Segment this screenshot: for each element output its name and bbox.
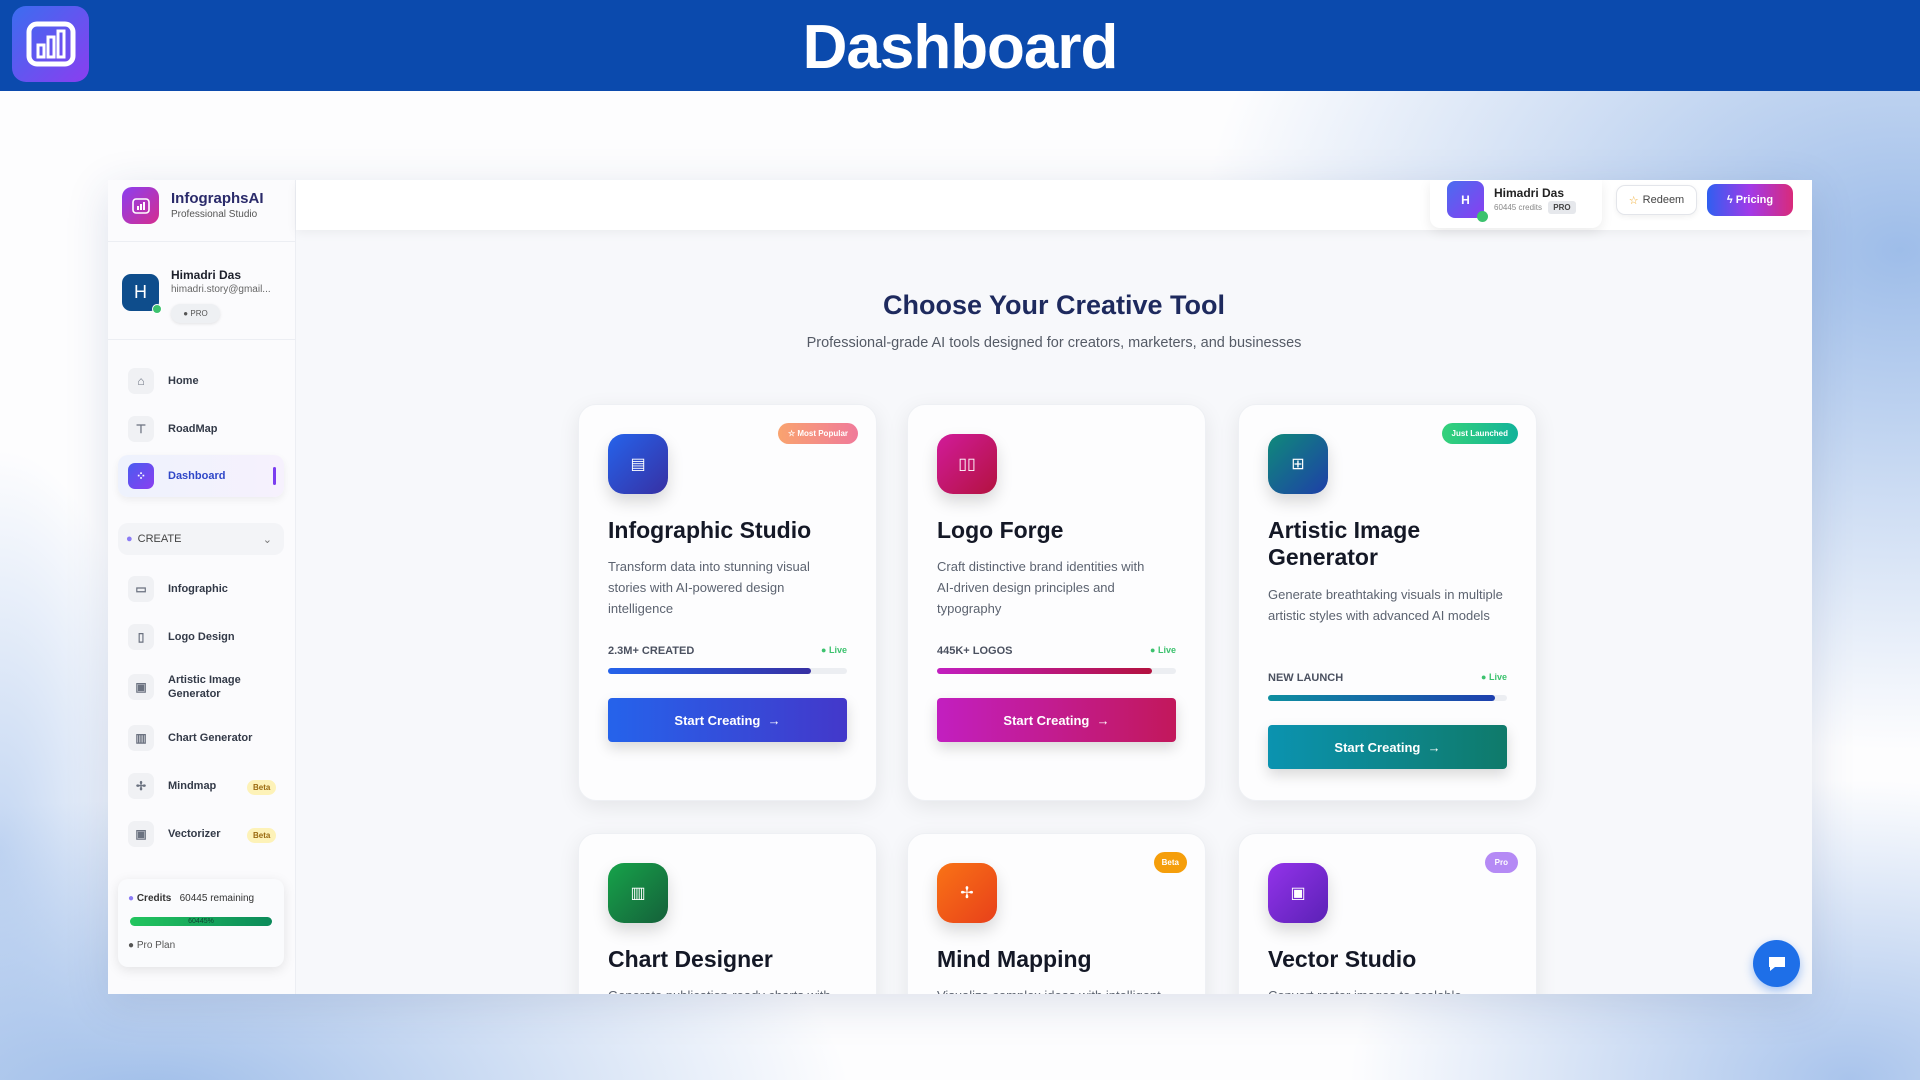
nav: Artistic Image Generator: Artistic Image (168, 674, 241, 686)
card: Artistic Image Generator: NEW LAUNCH (1268, 672, 1343, 684)
card: Artistic Image Generator: ⊞ (1291, 456, 1305, 473)
user profile: himadri.story@gmail... (171, 284, 271, 295)
credits box (118, 879, 284, 967)
card: Infographic Studio: ☆ Most Popular (788, 429, 848, 438)
redeem button: ☆ (1629, 194, 1639, 206)
nav: Infographic (128, 576, 228, 602)
nav: Artistic Image Generator (128, 674, 241, 700)
card: Vector Studio (1238, 833, 1537, 1053)
nav: Home (128, 368, 199, 394)
nav: Artistic Image Generator: ▣ (135, 680, 147, 694)
card: Artistic Image Generator: Artistic Image Generator (1268, 517, 1420, 570)
nav: Infographic: Infographic (168, 583, 228, 595)
section: CREATE (118, 523, 284, 555)
card: Infographic Studio: Infographic Studio (608, 517, 811, 543)
redeem button: Redeem (1643, 194, 1684, 206)
nav: Vectorizer (128, 821, 276, 847)
user chip: H (1461, 192, 1470, 206)
nav: Infographic: ▭ (135, 582, 147, 596)
pricing button (1707, 184, 1793, 216)
top bar (296, 180, 1812, 230)
nav: Artistic Image Generator: Generator (168, 688, 221, 700)
card: Vector Studio: Pro (1495, 858, 1508, 867)
credits box: ● Pro Plan (128, 940, 175, 951)
card: Infographic Studio: ● Live (821, 645, 847, 655)
user chip: 60445 credits PRO (1494, 203, 1571, 212)
card: Logo Forge (907, 404, 1206, 801)
pricing button: ϟ Pricing (1727, 194, 1773, 206)
nav: Mindmap: Mindmap (168, 780, 216, 792)
card: Infographic Studio: Start Creating → (674, 712, 781, 728)
card: Infographic Studio (578, 404, 877, 801)
user profile: ● PRO (183, 309, 208, 318)
heading: Choose Your Creative Tool (883, 290, 1225, 320)
icon: chat bubble (1753, 940, 1800, 987)
icon: sidebar logo (122, 187, 159, 224)
section: CREATE: ● (126, 533, 133, 545)
nav: RoadMap: RoadMap (168, 423, 218, 435)
card: Logo Forge: Craft distinctive brand identities with AI-driven design principles and typography (937, 559, 1144, 616)
nav: Mindmap (128, 773, 276, 799)
brand text: Professional Studio (171, 209, 257, 220)
user profile (108, 241, 296, 340)
user profile: Himadri Das (171, 268, 241, 282)
card: Infographic Studio: Transform data into stunning visual stories with AI-powered design intelligence (608, 559, 810, 616)
card: Artistic Image Generator: Start Creating → (1334, 740, 1441, 754)
nav: Dashboard active (118, 455, 284, 497)
title: Dashboard (803, 13, 1117, 82)
nav: Mindmap: ✢ (136, 779, 146, 793)
panel: sidebar (108, 180, 296, 994)
section: CREATE: ⌄ (263, 534, 272, 546)
header bar (0, 0, 1920, 91)
nav: Mindmap: Beta (253, 783, 270, 792)
nav: Chart Generator: Chart Generator (168, 732, 252, 744)
nav: Vectorizer: Beta (253, 831, 270, 840)
card: Artistic Image Generator: ● Live (1481, 672, 1507, 682)
card: Artistic Image Generator: Just Launched (1452, 429, 1508, 438)
nav: Dashboard active: ⁘ (136, 469, 146, 483)
icon: app logo (12, 6, 89, 82)
nav: Home: ⌂ (137, 374, 145, 388)
card: Infographic Studio: 2.3M+ CREATED (608, 645, 694, 657)
nav: Logo Design: Logo Design (168, 631, 235, 643)
card: Artistic Image Generator: Generate breathtaking visuals in multiple artistic styles with advanced AI models (1268, 587, 1503, 623)
user profile: H (134, 282, 147, 302)
credits box: ● Credits 60445 remaining (128, 893, 254, 904)
nav: Logo Design (128, 624, 235, 650)
panel: app screenshot (108, 180, 1812, 994)
section: CREATE: CREATE (138, 533, 181, 545)
card: Mind Mapping: Beta (1162, 858, 1179, 867)
user chip: Himadri Das (1494, 186, 1564, 200)
nav: Dashboard active: Dashboard (168, 470, 225, 482)
nav: RoadMap (128, 416, 218, 442)
nav: Vectorizer: ▣ (135, 827, 147, 841)
card: Logo Forge: Start Creating → (1003, 712, 1110, 728)
card: Chart Designer: ▥ (630, 885, 646, 902)
nav: Chart Generator: ▥ (135, 731, 147, 745)
card: Logo Forge: ▯▯ (958, 456, 976, 473)
card: Mind Mapping (907, 833, 1206, 1053)
card: Vector Studio: Vector Studio (1268, 946, 1416, 972)
brand text (171, 190, 264, 220)
card: Mind Mapping: ✢ (960, 885, 974, 902)
nav: Vectorizer: Vectorizer (168, 828, 221, 840)
card: Mind Mapping: Mind Mapping (937, 946, 1092, 972)
user chip (1430, 180, 1602, 228)
card: Artistic Image Generator (1238, 404, 1537, 801)
card: Logo Forge: ● Live (1150, 645, 1176, 655)
card: Logo Forge: Logo Forge (937, 517, 1063, 543)
nav: RoadMap: ⊤ (136, 422, 146, 436)
nav: Chart Generator (128, 725, 252, 751)
subheading: Professional-grade AI tools designed for creators, marketers, and businesses (807, 335, 1301, 351)
credits box: 60445% (188, 918, 214, 925)
nav: Logo Design: ▯ (138, 630, 144, 644)
nav: Home: Home (168, 375, 199, 387)
card: Vector Studio: ▣ (1290, 885, 1306, 902)
redeem button (1616, 185, 1697, 215)
card: Chart Designer (578, 833, 877, 1053)
brand text: InfographsAI (171, 190, 264, 207)
card: Chart Designer: Chart Designer (608, 946, 773, 972)
card: Logo Forge: 445K+ LOGOS (937, 645, 1013, 657)
card: Infographic Studio: ▤ (630, 456, 646, 473)
